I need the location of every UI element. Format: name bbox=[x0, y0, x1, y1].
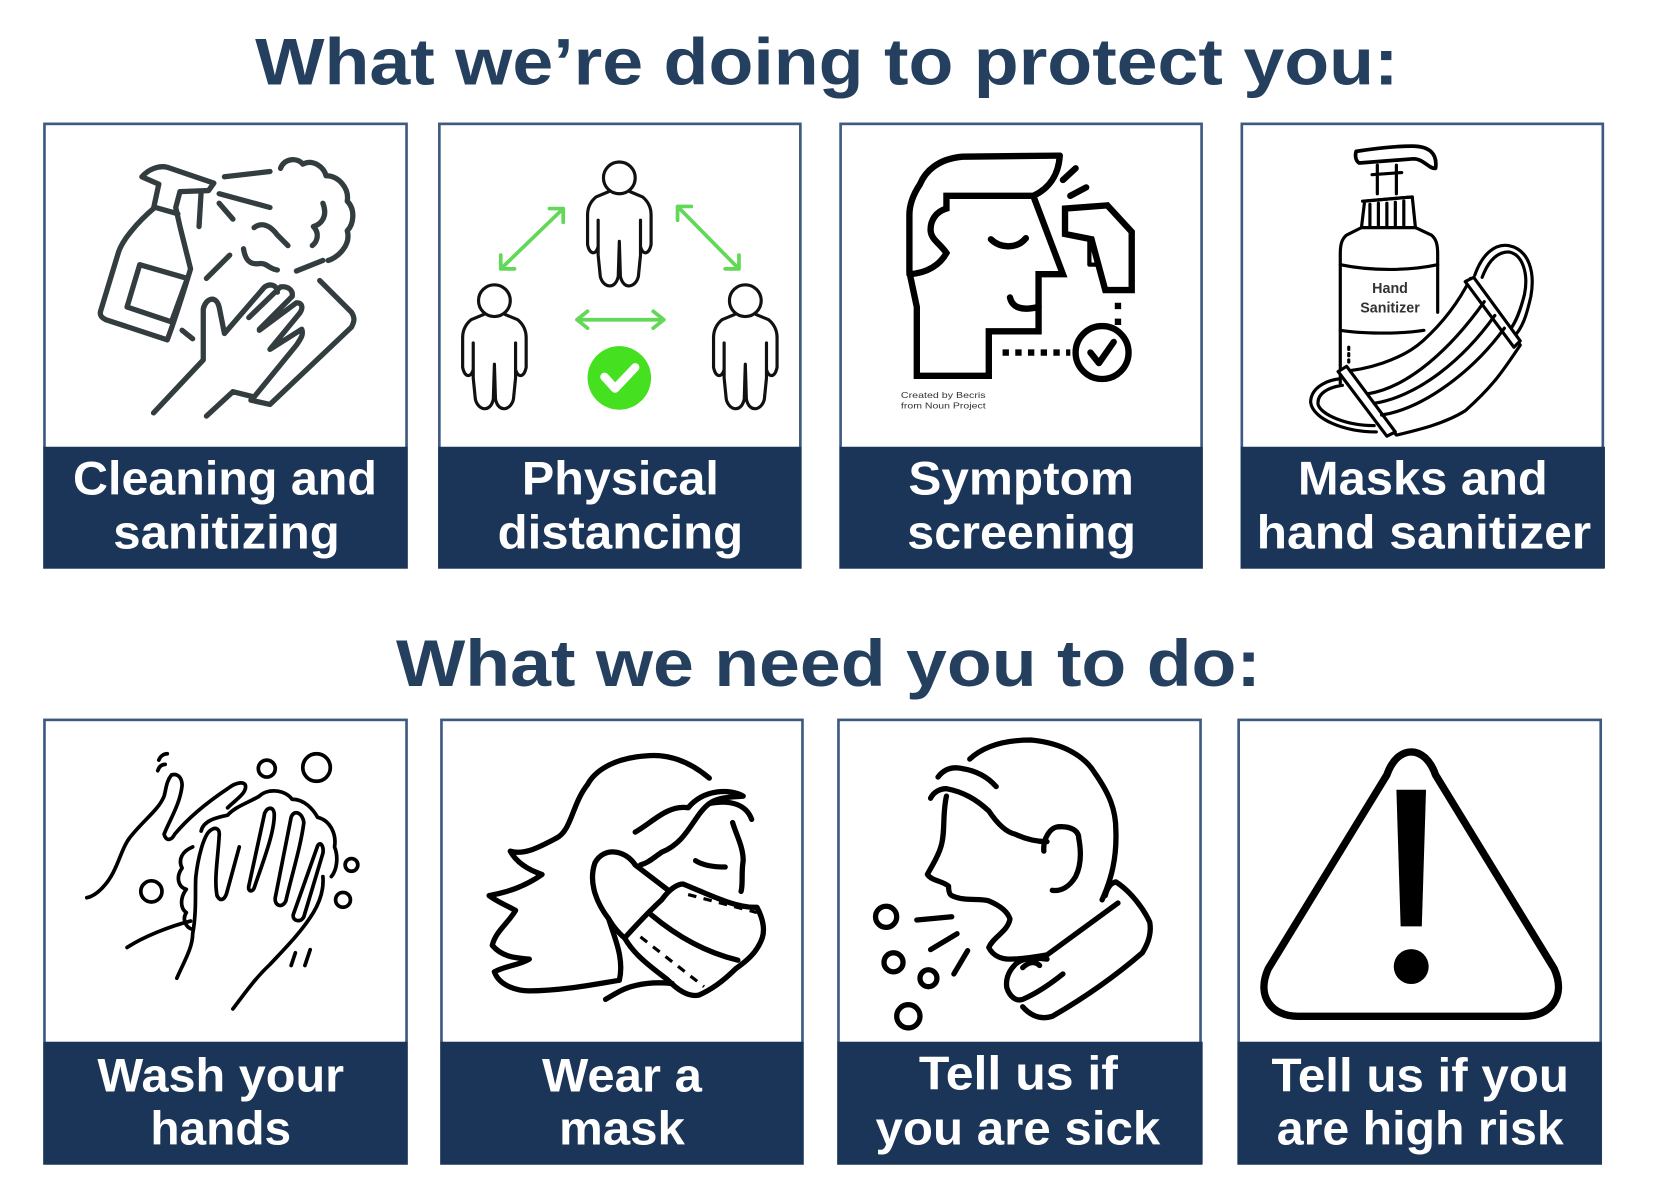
credit bbox=[901, 390, 986, 411]
panel: physical distancing bbox=[438, 124, 801, 568]
icon: warning triangle bbox=[1264, 752, 1558, 1016]
caption: Physical bbox=[522, 452, 719, 505]
caption: Cleaning and bbox=[73, 452, 377, 505]
panel: cleaning and sanitizing bbox=[43, 124, 408, 568]
caption: you are sick bbox=[876, 1102, 1161, 1155]
icon: sanitizer bottle and mask bbox=[1311, 146, 1532, 436]
caption: mask bbox=[559, 1102, 685, 1155]
caption: hands bbox=[150, 1102, 291, 1155]
caption: distancing bbox=[498, 506, 743, 559]
credit: Created by Becris bbox=[901, 390, 986, 400]
icon: three people apart bbox=[463, 162, 777, 409]
caption: screening bbox=[907, 506, 1136, 559]
caption: are high risk bbox=[1277, 1102, 1564, 1155]
bottle label: Sanitizer bbox=[1360, 300, 1420, 316]
credit: from Noun Project bbox=[901, 401, 986, 411]
bottle label bbox=[1360, 281, 1420, 316]
caption: Masks and bbox=[1298, 452, 1548, 505]
caption: Wear a bbox=[542, 1049, 702, 1102]
panel: masks and hand sanitizer bbox=[1241, 124, 1605, 568]
caption: hand sanitizer bbox=[1257, 506, 1591, 559]
arrows: distance between people bbox=[501, 206, 739, 328]
caption: Tell us if you bbox=[1271, 1049, 1569, 1102]
panel: wash your hands bbox=[43, 720, 408, 1165]
caption bbox=[97, 1049, 344, 1155]
icon: woman wearing a mask bbox=[489, 755, 763, 999]
icon: washing hands with soap bbox=[87, 754, 358, 1009]
icon: person coughing bbox=[876, 740, 1150, 1028]
title: what we need you to do: What we need you to do: bbox=[396, 627, 1261, 700]
caption bbox=[1271, 1049, 1569, 1155]
caption bbox=[73, 452, 377, 559]
caption bbox=[1257, 452, 1591, 559]
panel: tell us if you are high risk bbox=[1238, 720, 1602, 1165]
panel: wear a mask bbox=[440, 720, 804, 1165]
caption bbox=[498, 452, 743, 559]
caption: Wash your bbox=[97, 1049, 344, 1102]
icon: spray bottle and hand wiping bbox=[100, 160, 354, 416]
icon: green check bbox=[588, 346, 651, 410]
caption: Tell us if bbox=[919, 1047, 1118, 1100]
caption bbox=[542, 1049, 702, 1155]
bottle label: Hand bbox=[1372, 281, 1408, 297]
caption: sanitizing bbox=[113, 506, 340, 559]
caption bbox=[876, 1047, 1161, 1155]
caption bbox=[907, 452, 1136, 559]
panel: tell us if you are sick bbox=[837, 720, 1203, 1165]
panel: symptom screening bbox=[840, 124, 1203, 568]
icon: head with thermometer bbox=[909, 156, 1132, 379]
caption: Symptom bbox=[908, 452, 1134, 505]
title: what we're doing: What we’re doing to protect you: bbox=[255, 26, 1399, 99]
